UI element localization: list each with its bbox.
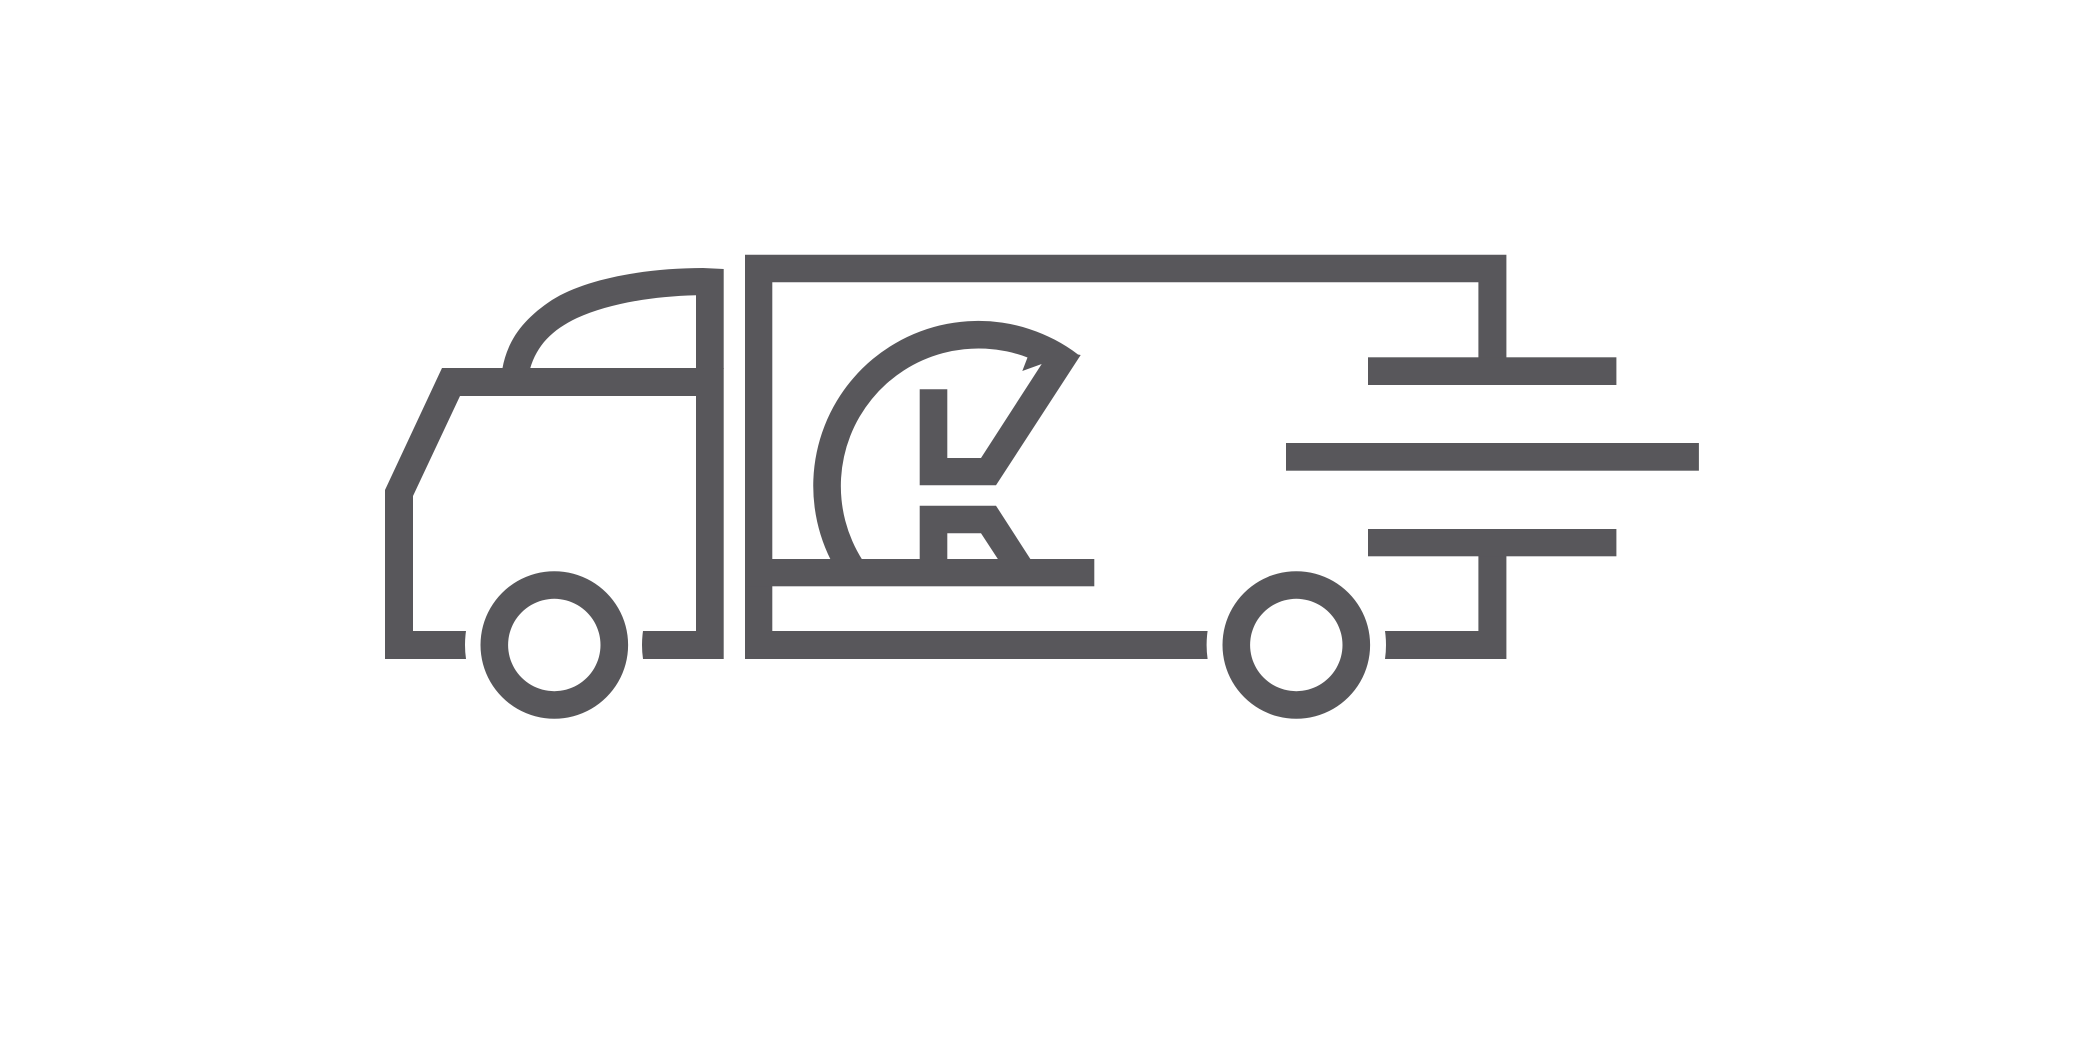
speed line: top <box>1368 357 1616 385</box>
cab body <box>385 368 724 659</box>
speed line: bottom <box>1368 529 1616 556</box>
cab windshield <box>502 268 724 369</box>
rear box corner <box>1385 556 1506 659</box>
speed line: middle <box>1286 443 1699 471</box>
logo: lower k leg <box>920 506 1031 560</box>
truck <box>385 255 1699 719</box>
front wheel <box>481 571 628 719</box>
rear wheel <box>1223 571 1370 719</box>
logo: base bar <box>745 559 1094 586</box>
logo: circular arc with upper k arm <box>813 321 1081 560</box>
cargo box outline <box>745 255 1506 659</box>
